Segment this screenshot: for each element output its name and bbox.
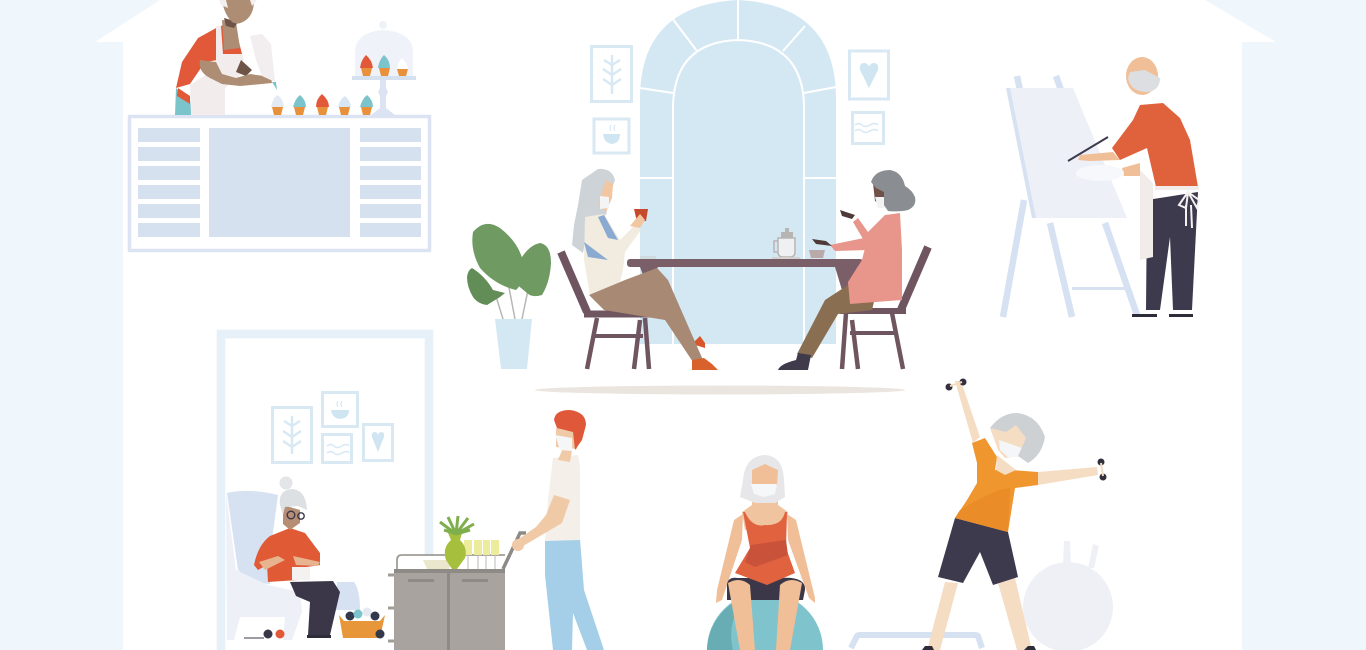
icon: frame heart and cup	[603, 63, 878, 144]
painter figure	[1068, 57, 1199, 317]
easel	[1003, 76, 1137, 317]
baker figure	[175, 0, 272, 115]
coffee press and cups	[640, 228, 825, 259]
glasses	[464, 540, 499, 569]
panel: woman on exercise ball	[707, 455, 823, 650]
panel: arched window	[640, 0, 836, 344]
step board	[851, 635, 982, 648]
cart rail	[397, 555, 505, 570]
left chair	[561, 252, 650, 369]
panel: woman with dumbbells	[851, 378, 1113, 650]
seated woman	[716, 455, 815, 650]
exercise ball	[707, 592, 823, 650]
armchair	[226, 491, 360, 640]
table	[627, 259, 863, 300]
yarn basket	[339, 608, 385, 638]
tea cart	[388, 410, 604, 650]
plant	[467, 224, 551, 369]
right chair	[840, 247, 928, 369]
cake stand	[352, 21, 416, 115]
counter	[130, 116, 430, 250]
right seated woman	[778, 170, 915, 370]
cupcakes	[271, 94, 373, 115]
bowls	[423, 560, 453, 569]
gallery icons	[331, 401, 384, 452]
door frame	[221, 334, 429, 650]
piping bag	[250, 34, 275, 82]
caregiver	[512, 410, 604, 650]
panel: baker at counter	[130, 0, 430, 250]
panel: dining table scene	[561, 169, 928, 370]
spare ball	[1023, 541, 1113, 650]
cart body	[388, 533, 526, 650]
canvas	[1006, 88, 1037, 218]
yarn balls on floor	[244, 630, 284, 638]
knitting woman	[254, 476, 340, 638]
left seated woman	[572, 169, 718, 370]
vase with plant	[440, 516, 474, 569]
dumbbells	[946, 378, 1106, 480]
panel: door with knitting woman	[221, 334, 429, 650]
exercising woman	[922, 378, 1106, 650]
panel: painter at easel	[1003, 57, 1199, 317]
frames gallery	[272, 392, 392, 462]
floor shadow	[535, 386, 905, 394]
wall frames beside window	[592, 46, 888, 153]
